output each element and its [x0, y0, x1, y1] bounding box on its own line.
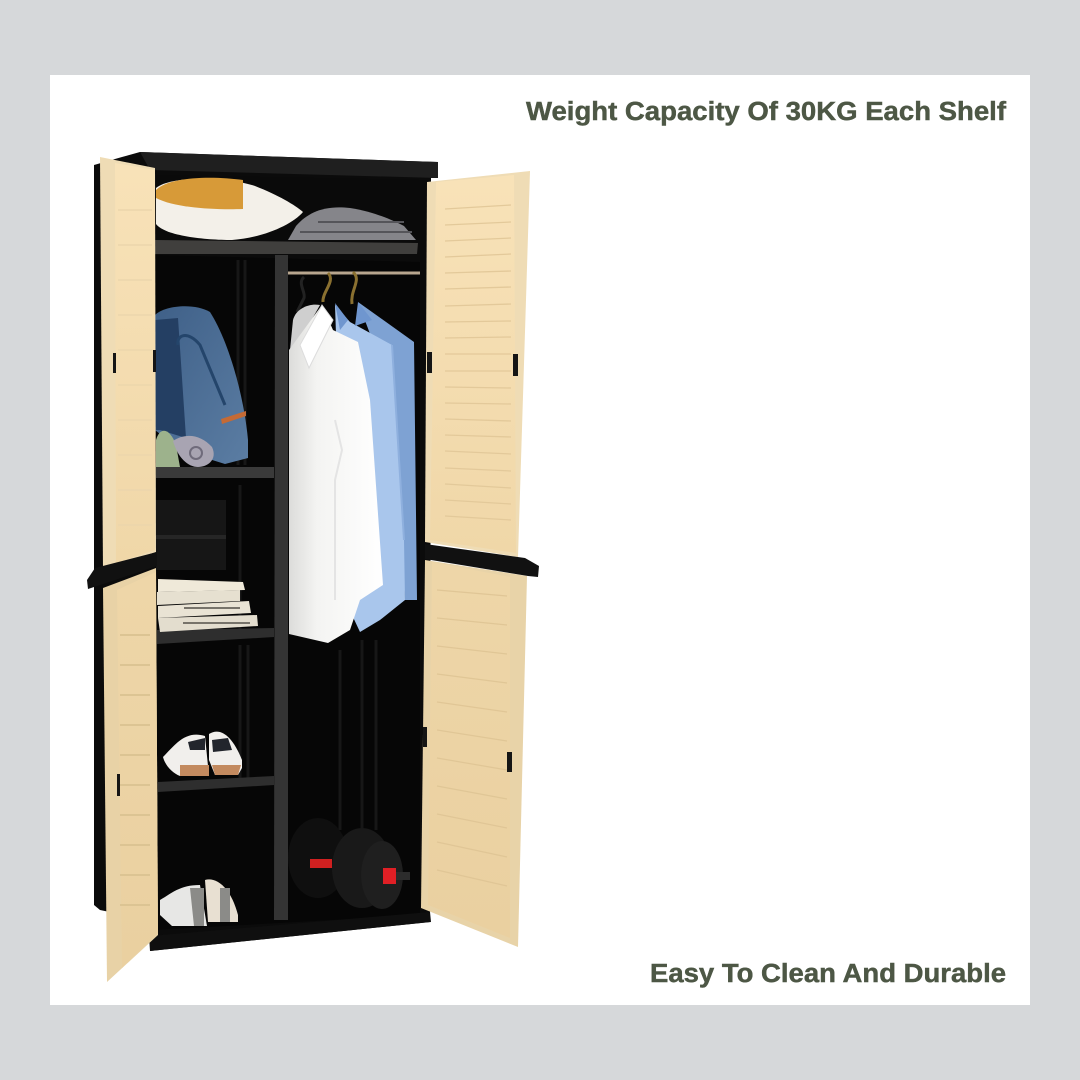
shoes, cabinet floor: [160, 879, 238, 926]
right lower door: [421, 560, 527, 947]
right upper door: [425, 171, 530, 557]
white panel: [50, 75, 1030, 1005]
left upper door: [100, 157, 156, 570]
shoes, middle shelf: [163, 732, 242, 776]
dumbbell: [288, 818, 410, 909]
cabinet body: [94, 152, 438, 951]
left lower door: [103, 568, 158, 982]
cabinet illustration: [87, 152, 539, 982]
right door hinge strap: [425, 544, 539, 577]
heading: easy to clean: Easy To Clean And Durable: [650, 960, 1006, 988]
folded clothes: [288, 207, 416, 240]
white shirt: [289, 305, 383, 643]
heading: weight capacity: Weight Capacity Of 30KG Each Shelf: [526, 98, 1007, 126]
shelf two: [156, 467, 274, 478]
books: [157, 579, 258, 632]
left door hinge strap: [87, 552, 157, 589]
rolled towels: [156, 431, 214, 467]
backpack: [155, 306, 248, 464]
shelf four: [158, 776, 274, 792]
pillow: [156, 178, 303, 240]
centre divider: [274, 255, 288, 920]
clothes rail: [288, 272, 420, 274]
blue shirts: [335, 302, 417, 632]
top shelf: [155, 240, 418, 254]
hangers: [297, 272, 356, 312]
shelf three: [157, 628, 274, 644]
